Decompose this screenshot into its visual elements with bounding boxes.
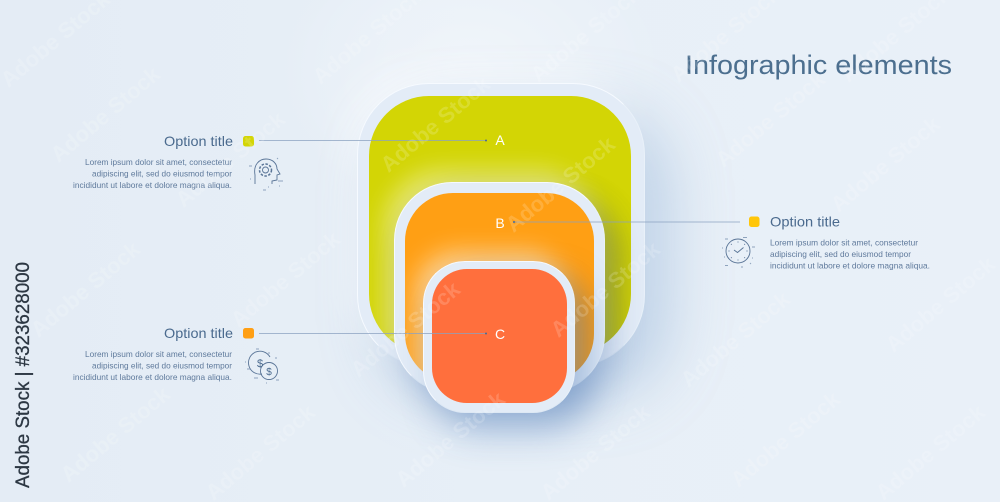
icon: head with gear xyxy=(249,158,283,190)
panel A outer rim xyxy=(357,83,645,367)
watermarks: Adobe Stock xyxy=(26,236,145,342)
watermarks: Adobe Stock xyxy=(676,286,795,392)
option C description: adipiscing elit, sed do eiusmod tempor xyxy=(92,360,232,370)
watermarks: Adobe Stock xyxy=(46,61,165,167)
option A block xyxy=(73,132,505,190)
option B description: incididunt ut labore et dolore magna aliqua. xyxy=(770,260,930,270)
watermarks: Adobe Stock xyxy=(346,276,465,382)
panel B orange fill xyxy=(405,193,594,382)
stock id caption: Adobe Stock | #323628000 xyxy=(13,262,34,488)
watermarks: Adobe Stock xyxy=(881,251,1000,357)
watermarks: Adobe Stock xyxy=(536,399,655,502)
watermarks: Adobe Stock xyxy=(501,131,620,237)
option A description: incididunt ut labore et dolore magna aliqua. xyxy=(73,180,232,190)
option C description: Lorem ipsum dolor sit amet, consectetur xyxy=(85,349,232,359)
option B heading: Option title xyxy=(770,214,840,230)
option A description: adipiscing elit, sed do eiusmod tempor xyxy=(92,168,232,178)
option B description xyxy=(770,238,930,270)
watermarks: Adobe Stock xyxy=(391,386,510,492)
watermarks: Adobe Stock xyxy=(56,381,175,487)
option C heading: Option title xyxy=(164,325,233,341)
watermarks: Adobe Stock xyxy=(171,106,290,212)
option C block xyxy=(73,325,505,383)
watermarks: Adobe Stock xyxy=(201,399,320,502)
icon: coins: $ xyxy=(266,367,272,378)
watermarks: Adobe Stock xyxy=(726,386,845,492)
panel B outer rim xyxy=(394,182,605,393)
option C marker xyxy=(243,328,254,338)
icon: coins: $ xyxy=(257,358,263,370)
letter B: B xyxy=(495,215,505,231)
letter A: A xyxy=(495,132,505,148)
panel A green fill xyxy=(369,96,631,354)
watermarks: Adobe Stock xyxy=(826,111,945,217)
watermarks: Adobe Stock xyxy=(226,226,345,332)
option B block xyxy=(495,214,930,270)
option A leader line xyxy=(259,140,487,142)
letter C: C xyxy=(495,326,505,342)
title: Infographic elements xyxy=(685,50,952,80)
option B leader line xyxy=(513,221,740,223)
option B marker xyxy=(749,216,760,227)
option C leader line xyxy=(259,332,487,334)
watermarks: Adobe Stock xyxy=(376,71,495,177)
option A heading: Option title xyxy=(164,133,233,149)
icon: clock xyxy=(722,238,755,267)
icon: coins xyxy=(245,349,279,383)
watermarks: Adobe Stock xyxy=(546,236,665,342)
panel C red fill xyxy=(432,269,567,403)
watermarks: Adobe Stock xyxy=(871,399,990,502)
option A description xyxy=(73,157,232,190)
option C description: incididunt ut labore et dolore magna aliqua. xyxy=(73,372,232,382)
option B description: Lorem ipsum dolor sit amet, consectetur xyxy=(770,238,918,248)
option A marker xyxy=(243,136,254,146)
watermarks: Adobe Stock xyxy=(711,66,830,172)
panel C outer rim xyxy=(423,261,575,413)
option C description xyxy=(73,349,232,382)
option A description: Lorem ipsum dolor sit amet, consectetur xyxy=(85,157,232,167)
option B description: adipiscing elit, sed do eiusmod tempor xyxy=(770,249,911,259)
